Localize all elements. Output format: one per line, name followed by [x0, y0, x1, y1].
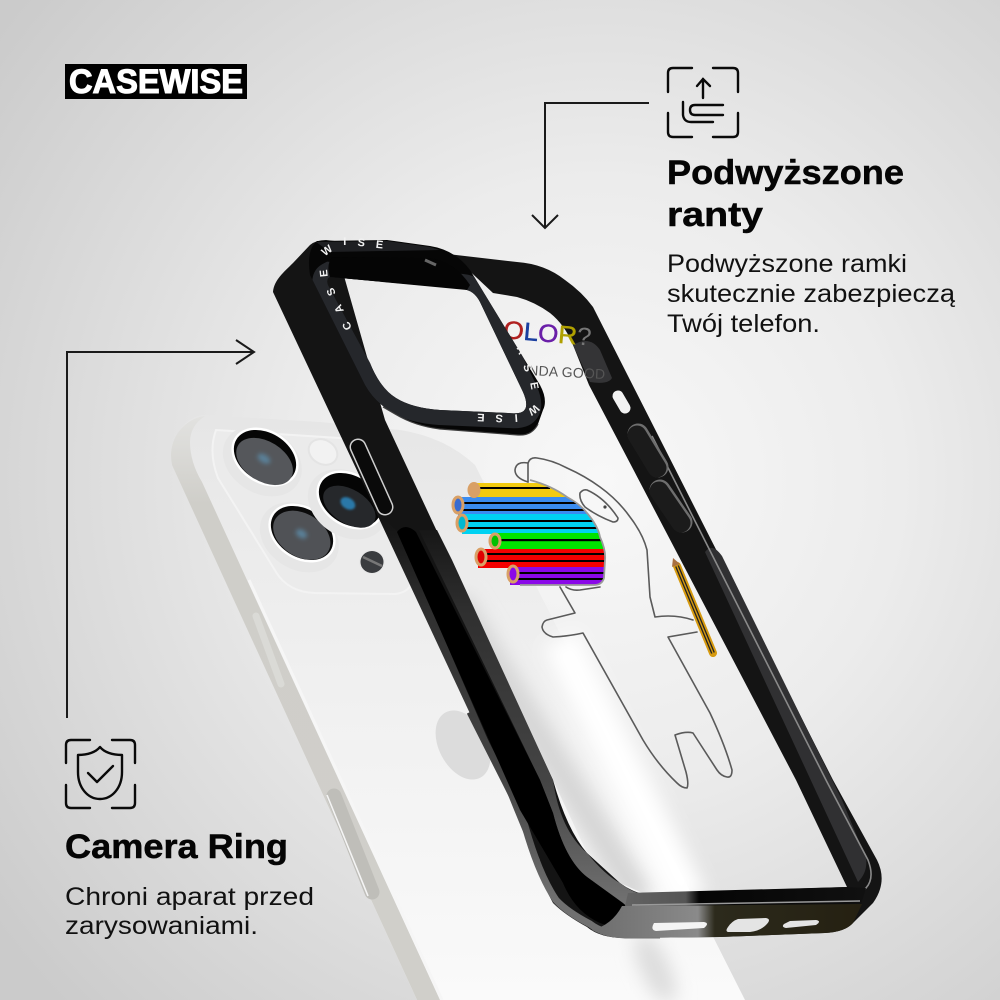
- lidar sensor: [359, 550, 385, 574]
- phone back: [171, 415, 745, 1000]
- ring body: [309, 240, 545, 435]
- camera control button: [358, 447, 385, 507]
- text: raised edges description: Twój telefon.: [667, 310, 820, 338]
- white phone: [171, 412, 745, 1000]
- left bumper inner grey band: [419, 530, 693, 905]
- lens right: [295, 455, 400, 554]
- case interior shading: [455, 600, 690, 900]
- text: raised edges description: [667, 250, 955, 338]
- ring brand text lower: CASEWISE: [478, 348, 540, 422]
- upper side button: [256, 616, 281, 684]
- logo: CASEWISE: CASEWISE: [69, 63, 243, 101]
- lower side button: [327, 795, 372, 896]
- blue pencil: [458, 497, 586, 516]
- arrow: camera ring: [67, 340, 254, 718]
- ring flat band: [327, 277, 526, 413]
- ring highlight: [425, 260, 436, 265]
- lower left outer edge: [470, 712, 660, 935]
- green pencil: [498, 533, 604, 549]
- phone side band: [171, 416, 440, 1000]
- silent switch hole: [618, 396, 625, 408]
- text: raised edges description: Podwyższone ramki: [667, 250, 907, 278]
- camera island: [212, 430, 412, 594]
- icon: shield: [66, 740, 135, 808]
- side highlight: [249, 580, 442, 1000]
- heading: Podwyższone ranty: [667, 154, 904, 234]
- dome outline: [520, 480, 605, 585]
- arrow: raised edges: [532, 103, 649, 228]
- left bumper outer band: [375, 510, 540, 860]
- lens top: [210, 412, 315, 511]
- icon: raised edges: [668, 68, 738, 137]
- ring edge gloss: [383, 407, 538, 435]
- right bumper lighter panel: [705, 548, 866, 882]
- usb port: [726, 918, 769, 932]
- text: camera ring description: zarysowaniami.: [65, 912, 258, 940]
- apple logo: [424, 701, 502, 789]
- heading: Podwyższone ranty: ranty: [667, 196, 763, 234]
- purple pencil: [510, 567, 610, 585]
- shadow on phone bottom: [626, 928, 684, 1000]
- rainbow pencils: [453, 480, 618, 585]
- right bumper highlight: [652, 436, 871, 893]
- camera ring: [309, 238, 545, 436]
- black slot: [397, 527, 628, 926]
- text: raised edges description: skutecznie zabezpieczą: [667, 280, 955, 308]
- red pencil: [478, 549, 608, 568]
- text: camera ring description: Chroni aparat przed: [65, 883, 314, 911]
- cyan pencil: [462, 514, 612, 534]
- ring inner wall: [328, 257, 470, 290]
- bottom wall: [592, 904, 862, 938]
- pencil tips: [453, 484, 518, 582]
- ring brand text upper: CASEWISE: [320, 238, 383, 330]
- ring top band: [316, 241, 440, 252]
- yellow pencil: [477, 483, 566, 497]
- dark translucent corner panel: [573, 341, 612, 383]
- case print: character outline: [515, 458, 732, 788]
- heading: Podwyższone ranty: Podwyższone: [667, 154, 904, 192]
- lower volume button: [659, 490, 682, 523]
- bottom lip: [625, 887, 866, 908]
- lens bottom: [247, 488, 352, 587]
- upper volume button: [637, 434, 658, 468]
- lip highlight: [632, 901, 860, 905]
- heading: Camera Ring: Camera Ring: [65, 828, 288, 866]
- black case bumper: [273, 240, 882, 938]
- text: camera ring description: [65, 883, 314, 940]
- small yellow pencil: [672, 558, 713, 653]
- speaker hole: [652, 922, 707, 931]
- speaker hole right: [783, 920, 819, 928]
- case print: kinda good text: NDA GOOD: [528, 362, 606, 382]
- case print: COLOR text: OLOR?: [502, 316, 593, 352]
- bumper body: [273, 240, 882, 938]
- flash: [304, 434, 342, 470]
